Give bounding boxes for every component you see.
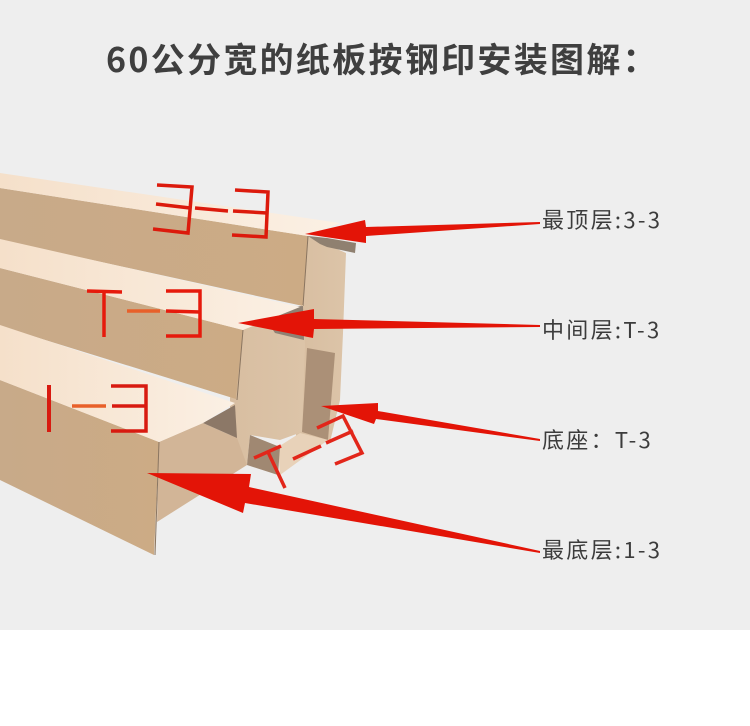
cardboard: middle side panel: [230, 305, 305, 470]
stamp mark: base T-3: [254, 416, 362, 488]
cardboard: bottom beam: [0, 325, 247, 555]
cardboard: middle beam: [0, 239, 300, 400]
cardboard: back side panel: [296, 236, 356, 442]
stamp mark: T-3: [87, 291, 200, 337]
arrow: middle layer: [238, 309, 540, 338]
label: bottom layer: 最底层:1-3: [542, 533, 662, 565]
cardboard: top beam: [0, 173, 340, 306]
arrow: top layer: [305, 220, 540, 243]
label: base: 底座：T-3: [542, 423, 653, 455]
arrow: bottom layer: [147, 473, 540, 553]
label: top layer: 最顶层:3-3: [542, 203, 662, 235]
stamp mark: 3-3: [153, 185, 268, 237]
cardboard: base foot: [247, 433, 328, 475]
cardboard: dark insert tab: [302, 348, 335, 440]
stamp mark: 1-3: [49, 385, 146, 432]
title: 60公分宽的纸板按钢印安装图解：: [106, 33, 659, 82]
label: middle layer: 中间层:T-3: [542, 313, 661, 345]
arrow: base: [321, 403, 540, 441]
